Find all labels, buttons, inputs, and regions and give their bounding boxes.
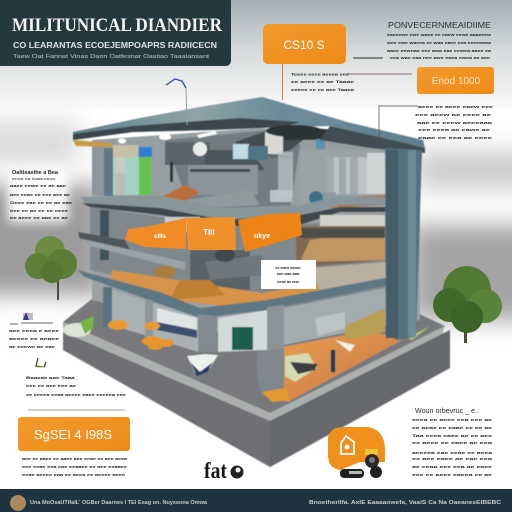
small green icon bbox=[36, 358, 46, 367]
text block: bottom right: ee aeee ee eaee ae eea bbox=[412, 441, 494, 445]
first floor slab bbox=[80, 196, 398, 220]
text block: upper left: Oeee eae ee ee ae eae bbox=[10, 201, 72, 205]
center white callout: eewe ae eew bbox=[277, 280, 299, 284]
text block: top right bbox=[386, 21, 492, 60]
orange floor lower level bbox=[110, 270, 390, 310]
orange floor banner: three signs bbox=[125, 213, 302, 252]
text block: under top center box: eeeee ee ee aee Taaea bbox=[291, 88, 356, 92]
text block: right of roof: aae ee eeew aeeeaaa bbox=[417, 121, 494, 125]
footer text right: Bnoetherllfa. AxlE Eaaaaowefa, VaaiS Ca Na OaeanesEIBEBC bbox=[309, 500, 501, 506]
equipment on second floor bbox=[190, 250, 250, 290]
orange box: right bbox=[417, 67, 494, 94]
text block: bottom right: eee ee aeee eaeea ee ae bbox=[412, 473, 492, 477]
text block: bottom left: aee ee aaee ee aaee aee eeae ee aee aeea bbox=[22, 457, 128, 461]
ground floor columns and rooms bbox=[103, 287, 112, 327]
orange floor banner: three signs: ukye bbox=[254, 233, 270, 240]
marker icon and text: middle left bbox=[9, 312, 59, 349]
marker icon and text: middle left: ae eeewe ae eae bbox=[9, 345, 55, 349]
text block: under top center box: Teeee eeee aeeea eee bbox=[291, 72, 349, 76]
orange floor area bbox=[263, 330, 402, 402]
building structure bbox=[73, 97, 425, 402]
text block: upper left: aaee eewe ee ae aae bbox=[10, 184, 66, 188]
upper floor interior bbox=[92, 128, 390, 222]
center white callout: ee ewne aeean bbox=[275, 266, 301, 270]
text block: lower left: eee ee aee eee ae bbox=[26, 384, 76, 388]
orange box: right: Enod 1000 bbox=[432, 76, 481, 87]
text block: top right: wee ewe waeea ee waa eaee eea eeeewww bbox=[386, 41, 491, 45]
text block: bottom right: Woun orbevruc _ e.. bbox=[415, 408, 479, 415]
right tree bbox=[433, 266, 502, 343]
text block: bottom right: ee aeae ee eaae ee ee ae bbox=[412, 426, 492, 430]
marker icon and text: middle left: aee eeea e aeee bbox=[9, 329, 59, 333]
text block: right of roof: aeee ee aeee eaew eee bbox=[418, 105, 493, 109]
footer bar bbox=[0, 489, 512, 512]
icon: orange badge with building and machine bbox=[328, 427, 385, 478]
text block: upper left bbox=[10, 170, 72, 220]
text block: bottom right: Taa eeea eaee ae ee aee bbox=[412, 434, 492, 438]
left tree bbox=[25, 236, 77, 300]
text block: top right: eea wae eaa nee awe eaea ewea ae aee bbox=[390, 56, 490, 60]
text block: bottom right: ae eeaa eee eea ae eaee bbox=[412, 465, 492, 469]
orange box: bottom left: SgSEI 4 I98S bbox=[34, 427, 112, 442]
text block: bottom right bbox=[412, 408, 494, 477]
text block: upper left: aee eeae ee eee aee ae bbox=[10, 193, 70, 197]
text block: bottom right: eeea ee aeee eea eee ae bbox=[412, 418, 492, 422]
roof bbox=[73, 97, 425, 148]
orange box: top center bbox=[263, 24, 346, 64]
text block: right of roof bbox=[379, 105, 494, 142]
ducts and ceiling equipment bbox=[165, 142, 210, 165]
orange box: top center: CS10 S bbox=[283, 38, 325, 52]
text block: bottom left: eee eeae eea eae eeaaee ee aee eeaaee bbox=[22, 465, 127, 469]
second floor interior bbox=[90, 207, 398, 310]
text block: upper left: Oaltlsasthe a Bea bbox=[12, 170, 58, 176]
ground floor rooms bbox=[112, 290, 198, 352]
text block: under top center box: ee aeee ee ae Taaae bbox=[291, 80, 354, 84]
icon: black figure and dot: fat bbox=[204, 458, 227, 483]
rooftop flag icon bbox=[166, 79, 187, 125]
text block: lower left bbox=[26, 376, 126, 410]
orange floor banner: three signs: cIIIs bbox=[154, 234, 166, 240]
text block: upper left: eee ee ae ee ee eeee bbox=[10, 209, 68, 213]
connector line to top center box bbox=[282, 58, 383, 100]
text block: top right: aaee eewnae eee awa eae eewea aaee ea bbox=[387, 49, 492, 53]
title heading: MILITUNICAL DIANDIER bbox=[12, 15, 222, 36]
second floor slab bbox=[78, 232, 130, 250]
text block: right of roof: eee aeew ae eeee ae bbox=[415, 113, 491, 117]
left windows bbox=[92, 147, 104, 195]
text block: bottom right: aeeeea eae eeae ee aeea bbox=[412, 451, 494, 455]
icon: black figure and dot bbox=[204, 458, 244, 483]
text block: top right: PONVECERNMEAIDIIME bbox=[388, 21, 491, 30]
title panel bbox=[0, 0, 231, 66]
back wall bbox=[92, 140, 420, 345]
footer logo bbox=[10, 495, 26, 511]
right central column bbox=[385, 148, 422, 340]
orange floor banner: three signs: TIII bbox=[203, 228, 215, 237]
text block: under top center box bbox=[291, 72, 412, 92]
base slab of the building bbox=[63, 298, 450, 467]
center white callout bbox=[261, 260, 316, 289]
central lounge bbox=[285, 353, 317, 382]
orange box: bottom left bbox=[18, 417, 130, 451]
text block: lower left: ee eeeea eeaa aeeee eaee eeeeea eee bbox=[26, 393, 126, 397]
text block: right of roof: eaae ee eea ae eeee bbox=[418, 136, 492, 140]
text block: right of roof: eee eeea ae eawe ae bbox=[418, 128, 490, 132]
subtitle: CO LEARANTAS ECOEJEMPOAPRS RADIICECN bbox=[13, 41, 217, 50]
upper right panels bbox=[326, 157, 398, 194]
footer text left: Una MoOsaUTIfaIL' OGBer Daarnes I TEI Esag on. Nuyxeona Omwa bbox=[30, 500, 207, 506]
reception desk bbox=[187, 354, 218, 373]
text block: bottom left: eeae aeeee eaa ee aeea ee aeeee aeee bbox=[22, 473, 125, 477]
text block: upper left: enoa ea Aaaeoeoa bbox=[12, 176, 56, 181]
text block: bottom left bbox=[22, 457, 128, 477]
tagline: Taew Oat Fannat Vinas Daon Oatfesnar Oastiao Taaalansant bbox=[13, 54, 210, 60]
text block: bottom right: ee aee eaee ae eae eea bbox=[412, 457, 494, 461]
marker icon and text: middle left: aeeee ee aeaee bbox=[9, 337, 59, 341]
center white callout: ewn wao waa bbox=[277, 272, 300, 276]
orange seating bbox=[108, 320, 128, 330]
text block: upper left: ee aeee ee aae ee ae bbox=[10, 216, 68, 220]
text block: lower left: Baaeae aae Taaa_ bbox=[26, 376, 79, 380]
text block: top right: eaeeewe ewe wane ee eaew eewe aaaeeew bbox=[387, 33, 491, 37]
